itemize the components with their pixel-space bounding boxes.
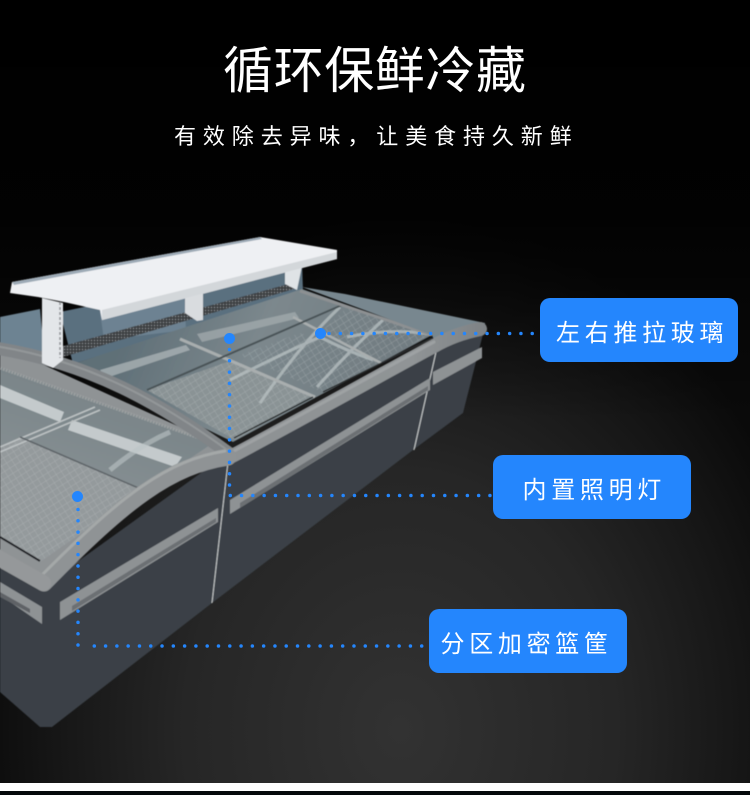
left back dome glass: [0, 309, 45, 362]
glass sliding seams: [147, 291, 432, 438]
right end curved lid: [302, 287, 485, 346]
panel separators: [212, 352, 436, 603]
back glass behind shelf: [60, 262, 303, 364]
callout connector: lighting: [224, 333, 490, 496]
curved rails: [0, 329, 480, 583]
freezer product illustration: [0, 237, 485, 727]
callout: 左右推拉玻璃: [540, 298, 738, 362]
callout: 内置照明灯: [493, 455, 691, 519]
display shelf: [10, 237, 337, 368]
callout connector: baskets: [72, 491, 423, 646]
handles: [0, 347, 482, 624]
title: 循环保鲜冷藏: [223, 43, 527, 99]
shelf near support: [42, 298, 63, 368]
callout: 分区加密篮筐: [429, 609, 627, 673]
shelf grille: [63, 283, 294, 357]
freezer top underlay: [0, 345, 230, 580]
callout: 左右推拉玻璃: 左右推拉玻璃: [556, 320, 728, 347]
callout: 分区加密篮筐: 分区加密篮筐: [440, 631, 613, 658]
freezer body front panels: [0, 330, 484, 727]
left section glass: [0, 367, 213, 562]
bottom white band: [0, 783, 750, 795]
subtitle: 有效除去异味，让美食持久新鲜: [174, 124, 579, 149]
shelf middle support: [185, 292, 203, 321]
callout: 内置照明灯: 内置照明灯: [522, 477, 666, 504]
shelf far support: [285, 266, 302, 290]
shelf board: [10, 237, 337, 320]
callout connector: sliding glass: [315, 328, 535, 339]
right section glass: [73, 289, 432, 442]
